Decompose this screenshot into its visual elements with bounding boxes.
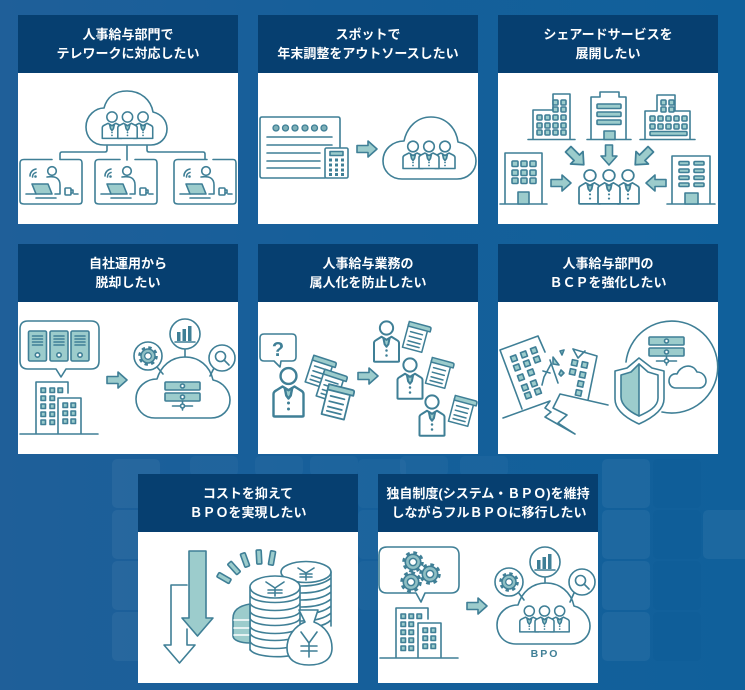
icon: cracked ground xyxy=(503,394,608,434)
heading: prevent dependence on individuals: 属人化を防止したい xyxy=(309,275,427,290)
icon: person with document 1 xyxy=(374,321,431,362)
arrow xyxy=(467,598,487,614)
heading: cost reduction: コストを抑えて xyxy=(203,486,293,501)
panel: telework xyxy=(18,15,238,224)
heading: leave in-house operation: 脱却したい xyxy=(95,275,161,290)
icon: cloud BPO team with services xyxy=(495,547,595,644)
heading: year-end adjustment xyxy=(258,15,478,73)
heading: leave in-house operation xyxy=(18,244,238,302)
panel: shared services xyxy=(498,15,718,224)
icon: pile of documents xyxy=(305,355,355,420)
icon: speech bubble with servers xyxy=(20,321,99,377)
heading: strengthen BCP: ＢＣＰを強化したい xyxy=(549,275,667,290)
icon: form document xyxy=(260,117,340,178)
heading: year-end adjustment: スポットで xyxy=(335,27,401,42)
arrow xyxy=(107,372,127,388)
arrows: converging xyxy=(551,143,666,191)
arrow xyxy=(357,141,377,157)
heading: leave in-house operation: 自社運用から xyxy=(89,256,167,271)
heading: telework xyxy=(18,15,238,73)
icon: person with question: ? xyxy=(272,339,284,361)
icon: collapsing building xyxy=(500,336,597,409)
icon: coin stacks xyxy=(233,562,331,657)
icon: person with document 2 xyxy=(398,357,454,399)
icon: building E xyxy=(667,156,715,204)
panel: prevent dependence on individuals xyxy=(258,244,478,454)
heading: strengthen BCP xyxy=(498,244,718,302)
icon: team xyxy=(579,170,639,204)
icon: person with document 3 xyxy=(420,395,477,436)
heading: telework: テレワークに対応したい xyxy=(56,46,200,61)
icon: remote worker 3 xyxy=(174,160,236,204)
panel: migrate to full BPO xyxy=(378,474,598,683)
icon: coin dashes xyxy=(217,550,276,584)
heading: shared services: シェアードサービスを xyxy=(543,27,673,42)
panel: cost reduction xyxy=(138,474,358,683)
icon: office buildings xyxy=(20,382,98,434)
icon: office buildings xyxy=(380,608,458,658)
heading: cost reduction: ＢＰＯを実現したい xyxy=(189,505,307,520)
icon: person with question xyxy=(260,334,304,416)
panel: leave in-house operation xyxy=(18,244,238,454)
icon: building B xyxy=(587,92,631,140)
icon: cloud team with connections xyxy=(60,91,205,160)
icon: cloud with services xyxy=(134,319,235,418)
heading: migrate to full BPO: しながらフルＢＰＯに移行したい xyxy=(391,505,587,520)
heading: migrate to full BPO: 独自制度(システム・ＢＰＯ)を維持 xyxy=(386,486,590,501)
icon: speech bubble with gears xyxy=(379,547,459,602)
heading: cost reduction xyxy=(138,474,358,532)
icon: building C xyxy=(640,95,695,140)
icon: building D xyxy=(500,153,547,204)
heading: prevent dependence on individuals xyxy=(258,244,478,302)
heading: shared services: 展開したい xyxy=(575,46,641,61)
heading: year-end adjustment: 年末調整をアウトソースしたい xyxy=(277,46,459,61)
panel: year-end adjustment xyxy=(258,15,478,224)
panel: strengthen BCP xyxy=(498,244,718,454)
icon: cloud team xyxy=(383,117,476,179)
icon: down arrows xyxy=(164,551,213,663)
icon: money bag xyxy=(287,610,332,665)
heading: prevent dependence on individuals: 人事給与業務の xyxy=(322,256,414,271)
icon: remote worker 1 xyxy=(20,160,82,204)
icon: shield with server and cloud xyxy=(615,321,718,424)
label: BPO: BPO xyxy=(531,648,559,660)
icon: calculator xyxy=(325,148,348,178)
heading: telework: 人事給与部門で xyxy=(82,27,174,42)
heading: shared services xyxy=(498,15,718,73)
heading: migrate to full BPO xyxy=(378,474,598,532)
heading: strengthen BCP: 人事給与部門の xyxy=(562,256,654,271)
icon: remote worker 2 xyxy=(95,160,157,204)
arrow xyxy=(358,368,378,384)
icon: building A xyxy=(528,94,575,140)
